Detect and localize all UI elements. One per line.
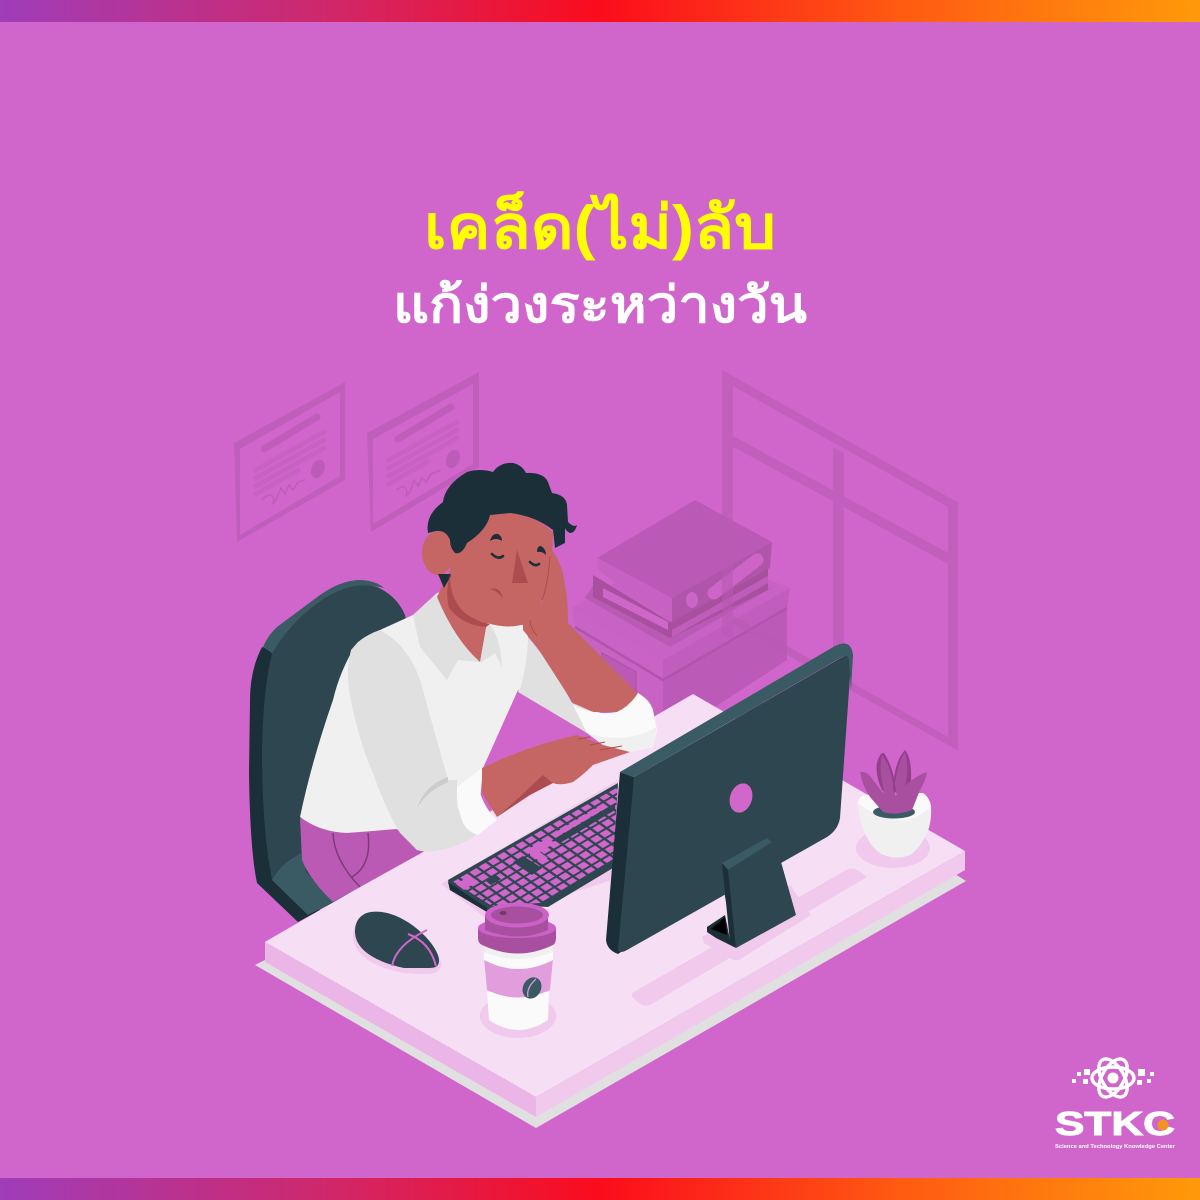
cup sleeve (484, 958, 553, 998)
keyboard (441, 780, 618, 920)
keyboard gap and space bar (513, 856, 542, 875)
sleeve wrinkle (417, 777, 448, 808)
monitor stand (722, 838, 796, 948)
window frame (722, 370, 958, 750)
box body (575, 608, 787, 720)
potted plant (856, 750, 931, 868)
coffee cup (478, 902, 556, 1038)
title (393, 191, 807, 333)
chair seat (272, 853, 333, 915)
binder labels (686, 592, 698, 608)
chair (249, 580, 420, 922)
man (300, 463, 657, 902)
desk recess groove (632, 868, 867, 1006)
chair top edge (263, 580, 384, 653)
cup bottom (487, 992, 549, 1030)
monitor back (618, 655, 851, 952)
hand creases (530, 556, 550, 636)
logo atom icon (1092, 1054, 1134, 1102)
desk right face (536, 851, 965, 1117)
certificate right (367, 372, 479, 532)
box lid (572, 545, 790, 660)
heading: white line: แก้ง่วงระหว่างวัน (393, 277, 807, 333)
cup lid upper (485, 915, 548, 936)
desk top (265, 694, 965, 1097)
pot shadow (856, 828, 930, 868)
keys (452, 787, 618, 906)
logo tagline: Science and Technology Knowledge Center (1055, 1144, 1176, 1150)
lower binder (593, 566, 768, 638)
eyes closed (492, 554, 539, 565)
logo pixel squares (1072, 1069, 1154, 1085)
jaw shadow (447, 575, 490, 627)
mouse shadow (353, 914, 441, 974)
keyboard body (448, 783, 618, 912)
mouse lines (392, 930, 436, 966)
arm and hand on cheek (523, 550, 637, 712)
bottom gradient bar (0, 1178, 1200, 1200)
ear (422, 531, 454, 575)
desk (255, 694, 966, 1128)
stand foot (707, 915, 736, 948)
logo orange dot (1158, 1120, 1168, 1130)
collar front (480, 623, 528, 690)
hair back lock (438, 574, 452, 588)
desk left face (265, 942, 536, 1117)
monitor top edge (620, 643, 853, 777)
nose (512, 550, 528, 583)
plant leaves (877, 753, 895, 800)
logo wordmark: STKC (1055, 1105, 1175, 1142)
monitor (606, 643, 853, 954)
pants crease (333, 833, 369, 887)
collar right (480, 623, 502, 667)
pot (858, 793, 931, 858)
chair back (262, 585, 420, 915)
eyebrows (490, 534, 546, 555)
monitor logo hole (726, 780, 756, 816)
right sleeve shade (518, 637, 650, 752)
file box and binders (572, 500, 790, 720)
pot soil (873, 806, 915, 818)
mouse body (355, 912, 439, 968)
pants (300, 818, 425, 902)
certificate left (234, 382, 345, 542)
keyboard shadow (441, 780, 618, 920)
STKC logo (1055, 1054, 1176, 1150)
hair (428, 463, 577, 553)
neck (437, 570, 490, 662)
box label (602, 653, 636, 692)
collar shade (413, 593, 480, 680)
wall certificates (234, 372, 479, 542)
cup top band (484, 942, 553, 969)
desk edge over chair (265, 852, 470, 960)
face (450, 513, 553, 626)
mouse (353, 912, 441, 974)
torso shirt (300, 590, 640, 852)
binder base shadow (585, 585, 773, 647)
heading: yellow line: เคล็ด(ไม่)ลับ (424, 191, 776, 261)
left forearm (482, 735, 630, 817)
right cuff (573, 693, 657, 752)
cup lid lower (478, 928, 556, 954)
top binder (597, 500, 772, 598)
top gradient bar (0, 0, 1200, 22)
desk base (255, 874, 966, 1128)
monitor stand shadow (702, 885, 811, 960)
mouth (490, 588, 503, 598)
cup shadow (480, 994, 556, 1038)
left cuff (457, 768, 497, 835)
left sleeve shade (348, 630, 477, 852)
coffee bean (519, 974, 545, 1002)
monitor side (606, 772, 634, 954)
chair side (249, 647, 320, 922)
